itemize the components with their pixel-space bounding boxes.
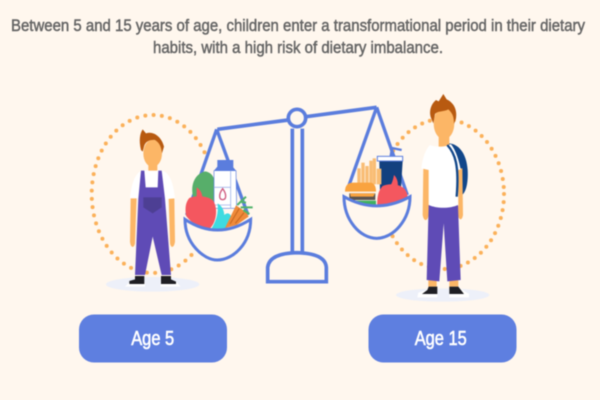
- button: Age 15: Age 15: [415, 328, 467, 350]
- shoes: [417, 287, 469, 297]
- backpack strap: [447, 145, 457, 197]
- character: age 15 teen: [396, 94, 489, 302]
- pan strings: [347, 107, 407, 195]
- left pan with healthy food: [185, 129, 253, 260]
- pan rim and bowl: [185, 219, 251, 260]
- shirt: [130, 171, 175, 210]
- pan rim and bowl: [344, 197, 410, 238]
- dotted circle: age 5: [92, 115, 214, 273]
- overalls: [135, 171, 171, 275]
- balance scale: [217, 107, 377, 282]
- title: [11, 16, 585, 57]
- shirt: [421, 144, 461, 208]
- icon: burger: [345, 183, 376, 208]
- arms and neck: [423, 137, 463, 287]
- icon: cyan fish: [212, 203, 231, 229]
- icon: lettuce: [192, 171, 216, 207]
- pan strings: [187, 129, 248, 215]
- backpack: [447, 143, 468, 197]
- shadow: [106, 277, 199, 292]
- right pan with junk food: [344, 107, 410, 238]
- overalls pocket: [143, 197, 162, 213]
- head: [434, 107, 454, 139]
- title: habits, with a high risk of dietary imbalance.: [153, 38, 443, 57]
- character: age 5 child: [106, 129, 199, 292]
- icon: carrots: [225, 197, 253, 228]
- trousers: [427, 205, 461, 281]
- icon: fries: [357, 158, 381, 184]
- arms and neck: [130, 165, 175, 247]
- hair: [430, 94, 456, 124]
- icon: apple: [186, 187, 216, 228]
- shadow: [396, 288, 489, 302]
- dotted circle: age 15: [382, 119, 504, 269]
- icon: milk carton: [214, 160, 237, 208]
- icon: apple: [377, 175, 407, 208]
- button: Age 5: [79, 314, 227, 362]
- button: Age 15: [368, 314, 516, 362]
- shoes: [125, 276, 181, 287]
- hair: [140, 129, 164, 153]
- button: Age 5: Age 5: [131, 328, 174, 350]
- head: [143, 140, 162, 167]
- icon: soft drink: [377, 148, 403, 193]
